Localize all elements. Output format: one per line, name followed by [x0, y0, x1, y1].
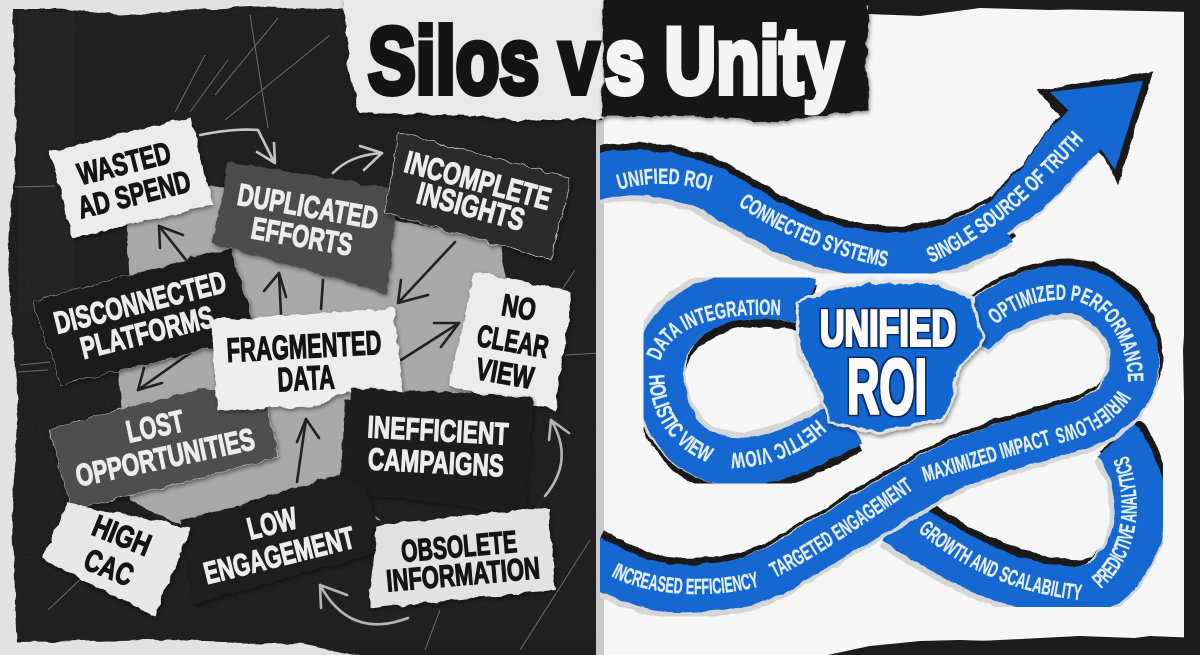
label: optimized performance: OPTIMIZED PERFORMANCE: [988, 284, 1144, 382]
note: lost opportunities: OPPORTUNITIES: [72, 421, 258, 494]
title panel: white half: [343, 0, 604, 120]
note: disconnected platforms: [32, 247, 253, 385]
note: incomplete insights: INCOMPLETE: [401, 144, 555, 217]
panel: silos dark torn background: [7, 2, 610, 655]
label: growth and scalability: GROWTH AND SCALABILITY: [920, 521, 1083, 600]
note: low engagement: LOW: [244, 500, 301, 547]
note: incomplete insights: [385, 132, 570, 259]
label: targeted engagement: TARGETED ENGAGEMENT: [768, 476, 912, 577]
note: low engagement: ENGAGEMENT: [200, 520, 358, 591]
panel: unity white paper background: [596, 0, 1200, 655]
label: increased efficiency: INCREASED EFFICIENCY: [612, 562, 757, 594]
label: connected systems: CONNECTED SYSTEMS: [740, 194, 888, 266]
note: fragmented data: FRAGMENTED: [226, 324, 382, 370]
note: high cac: HIGH: [87, 508, 156, 563]
note: obsolete information: [369, 507, 555, 608]
arrow: fragmented to no clear view: [401, 323, 459, 360]
note: no clear view: VIEW: [473, 351, 537, 396]
note: duplicated efforts: DUPLICATED: [235, 177, 381, 236]
label: maximized impact: MAXIMIZED IMPACT: [921, 430, 1049, 482]
arrow: disconnected to wasted: [159, 226, 186, 260]
torn black frame: top edge: [868, 0, 1200, 16]
label: predictive analytics: PREDICTIVE ANALYTICS: [1091, 456, 1137, 589]
note: no clear view: [448, 272, 572, 411]
note: fragmented data: DATA: [277, 359, 336, 399]
note: low engagement: [180, 475, 385, 604]
ribbon: lower right loop: [880, 421, 1163, 607]
label: holistic view: HOLISTIC VIEW: [648, 375, 715, 462]
arrow: inefficient campaigns to no clear view: [545, 420, 569, 496]
ribbon: right loop and diagonal: [600, 258, 1164, 616]
icon: arrow head: [1050, 81, 1143, 170]
note: disconnected platforms: PLATFORMS: [77, 299, 217, 366]
note: inefficient campaigns: [341, 388, 534, 514]
note: fragmented data: [210, 309, 403, 411]
centre badge: unified roi: ROI: [847, 342, 927, 431]
note: duplicated efforts: [212, 162, 400, 293]
centre badge: unified roi: UNIFIED: [820, 300, 956, 358]
note: wasted ad spend: [50, 117, 213, 238]
torn black frame: right edge: [1184, 0, 1200, 655]
label: data integration: DATA INTEGRATION: [646, 299, 780, 360]
note: wasted ad spend: WASTED: [74, 135, 174, 192]
note: high cac: CAC: [79, 542, 139, 593]
label: wrieflows: WRIEFLOWS: [1056, 390, 1132, 444]
arrow: low engagement to fragmented: [297, 419, 319, 482]
arrow: fragmented to duplicated left: [264, 273, 286, 316]
note: wasted ad spend: AD SPEND: [74, 164, 194, 225]
arrow stub: fragmented to duplicated right: [321, 280, 323, 309]
label: single source of truth: SINGLE SOURCE OF TRUTH: [926, 130, 1084, 262]
arrow: duplicated efforts to incomplete insights: [333, 146, 382, 173]
note: lost opportunities: LOST: [123, 403, 187, 450]
note: no clear view: CLEAR: [474, 318, 551, 365]
note: duplicated efforts: EFFORTS: [249, 210, 355, 263]
grey paper beneath notes: [118, 185, 507, 525]
arrow: obsolete information to low engagement: [320, 585, 408, 624]
note: lost opportunities: [50, 387, 279, 511]
label: unified roi: UNIFIED ROI: [616, 168, 713, 190]
note: inefficient campaigns: CAMPAIGNS: [367, 441, 505, 484]
arrow: disconnected to lost: [138, 351, 193, 390]
arrow: incomplete to centre: [398, 242, 455, 303]
note: inefficient campaigns: INEFFICIENT: [367, 409, 509, 452]
note: obsolete information: INFORMATION: [385, 550, 541, 599]
note: no clear view: NO: [499, 287, 539, 328]
torn black frame: bottom edge: [828, 636, 1200, 655]
note: disconnected platforms: DISCONNECTED: [51, 264, 230, 341]
note: high cac: [42, 503, 191, 617]
title: Silos v: [368, 8, 599, 113]
ribbon: top flow with arrow: [600, 72, 1154, 274]
title: [368, 8, 843, 113]
arrow: wasted spend to duplicated efforts: [200, 130, 275, 163]
title panel: black half: [602, 0, 869, 122]
note: obsolete information: OBSOLETE: [400, 524, 518, 569]
note: incomplete insights: INSIGHTS: [413, 175, 529, 238]
ribbon: left loop: [644, 278, 862, 484]
label: hettic viow: HETTIC VIOW: [732, 420, 826, 468]
centre badge: unified roi: [796, 282, 983, 433]
title: s Unity: [605, 8, 843, 113]
